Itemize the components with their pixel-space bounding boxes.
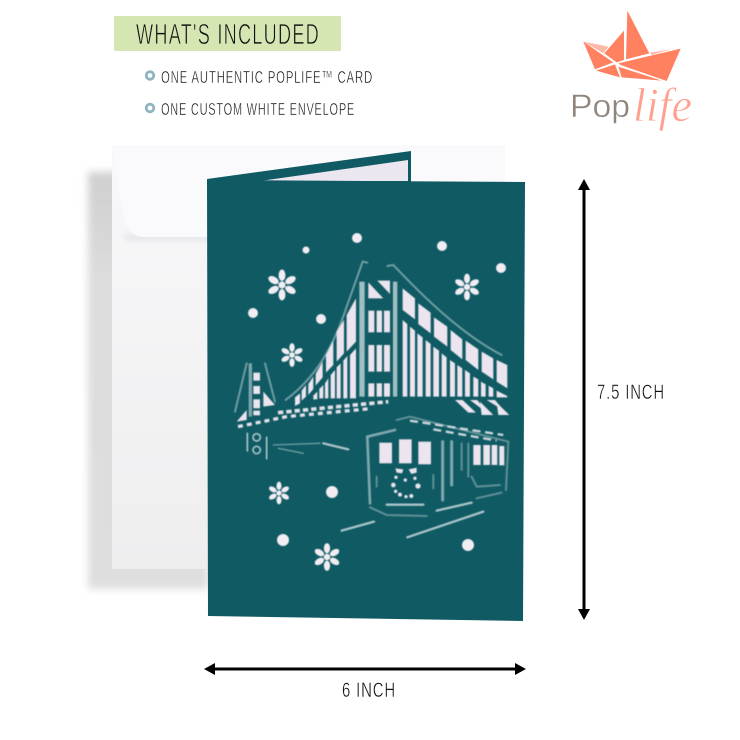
small distant tower [237,363,275,422]
label: width: 6 INCH [342,679,396,702]
card back panel [207,151,411,184]
bridge deck dashes [238,402,388,427]
road streaks [273,443,483,537]
snow dots [248,233,506,551]
heading: what's included [114,16,341,51]
item: white envelope [146,99,355,119]
logo: poplife [570,11,692,132]
envelope shadow [88,172,208,589]
arrow: width dimension [204,663,526,675]
logo wordmark: Pop: Pop [570,88,630,124]
item: white envelope: ONE CUSTOM WHITE ENVELOPE [161,99,355,119]
heading: what's included: WHAT'S INCLUDED [136,19,320,51]
trolley car [247,417,508,537]
wreath [391,468,421,498]
bridge deck trusses [455,400,509,415]
envelope body [112,145,505,569]
list: included items [146,67,373,119]
trolley windows [379,439,504,465]
envelope flap [112,145,505,237]
logo wordmark: life: life [633,79,692,132]
greeting card [207,151,525,621]
icon: origami boat [583,11,681,81]
trolley outlines [367,417,508,516]
bridge cables [235,262,502,412]
item: poplife card: ONE AUTHENTIC POPLIFE™ CARD [161,67,373,87]
trolley roof marks [410,421,503,441]
bridge anchor lattice [247,433,267,459]
envelope [88,145,505,589]
main tower strips [359,282,365,397]
snowflakes [267,270,480,571]
left span panels [295,298,356,406]
label: height: 7.5 INCH [597,381,665,404]
right span panels [403,288,507,397]
arrow: height dimension [578,179,590,620]
main tower panels [368,281,390,397]
card front [207,180,525,621]
bridge and trolley cutout [235,233,509,571]
item: poplife card [146,67,373,87]
golden gate bridge [235,262,509,427]
